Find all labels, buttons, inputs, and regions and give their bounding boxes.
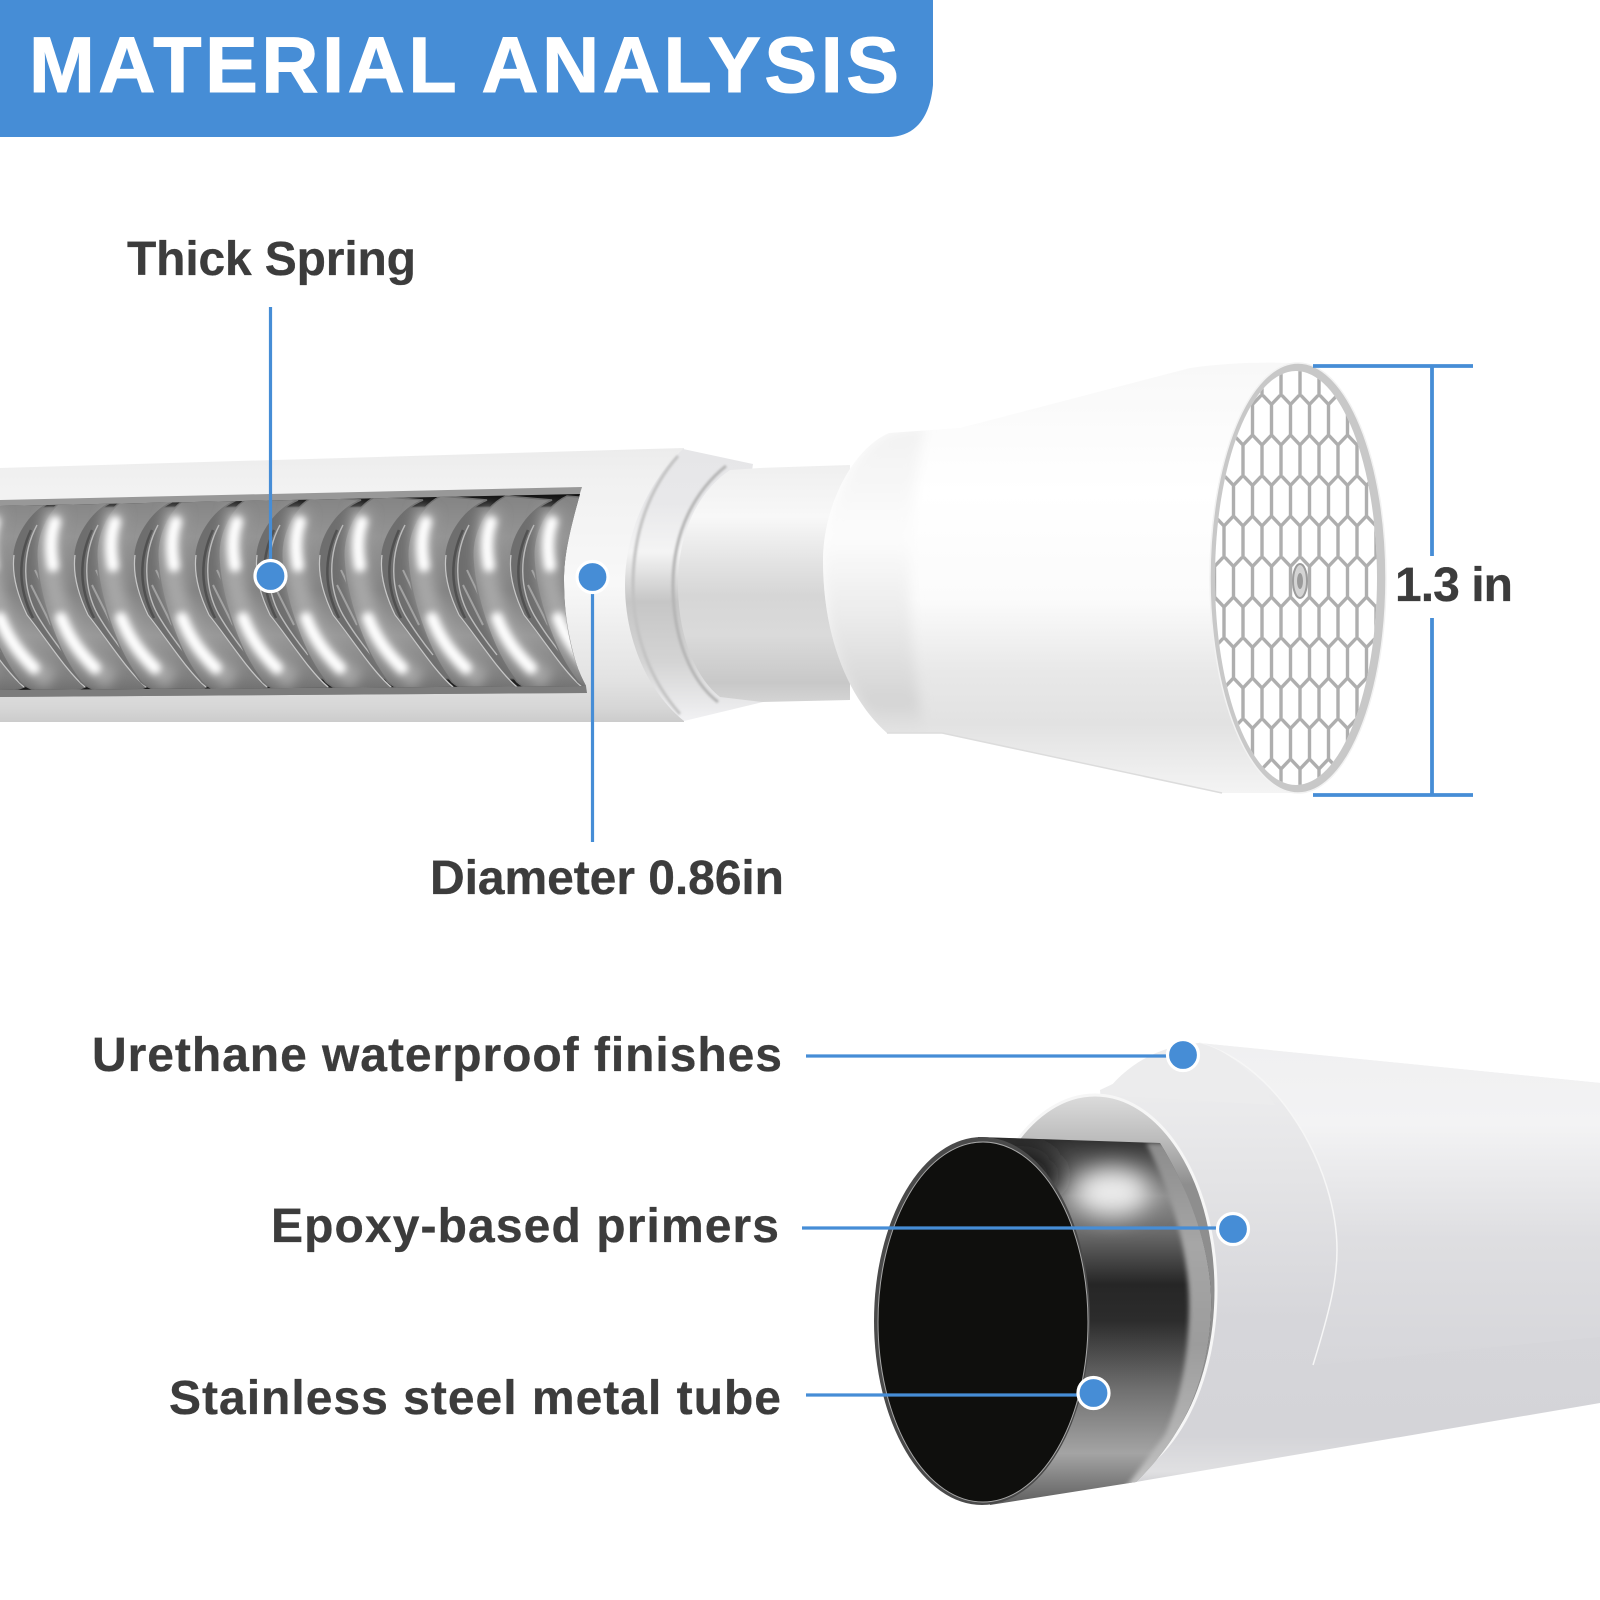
title: MATERIAL ANALYSIS [29, 20, 899, 109]
outer rod tube [0, 448, 684, 722]
callout: thick spring [127, 233, 416, 592]
dimension: 1.3 in: 1.3 in [1395, 559, 1513, 612]
outer tube body [1100, 1043, 1600, 1482]
callout: urethane waterproof finishes: Urethane waterproof finishes [92, 1029, 782, 1082]
thin inner rod [678, 465, 850, 702]
callout: epoxy-based primers [271, 1200, 1248, 1253]
callout: diameter [430, 562, 784, 905]
spring window frame [0, 487, 587, 697]
clear collar [625, 449, 767, 721]
honeycomb face [1210, 363, 1390, 795]
callout: stainless steel metal tube [169, 1372, 1109, 1425]
urethane layer [1104, 1043, 1600, 1365]
callout: epoxy-based primers: Epoxy-based primers [271, 1200, 779, 1253]
dimension: 1.3 in [1313, 366, 1513, 795]
callout: thick spring: Thick Spring [127, 233, 416, 286]
stainless steel tube body [978, 1137, 1212, 1505]
callout: stainless steel metal tube: Stainless steel metal tube [169, 1372, 781, 1425]
epoxy primer layer [974, 1095, 1216, 1485]
end cap [823, 431, 1290, 794]
callout: urethane waterproof finishes [92, 1029, 1198, 1082]
tube opening [874, 1137, 1090, 1505]
panel: tube layers cross-section [874, 1043, 1600, 1510]
callout: diameter: Diameter 0.86in [430, 852, 784, 905]
panel: shower rod cutaway [0, 363, 1390, 795]
spring coils [0, 494, 586, 690]
header banner [0, 0, 933, 137]
